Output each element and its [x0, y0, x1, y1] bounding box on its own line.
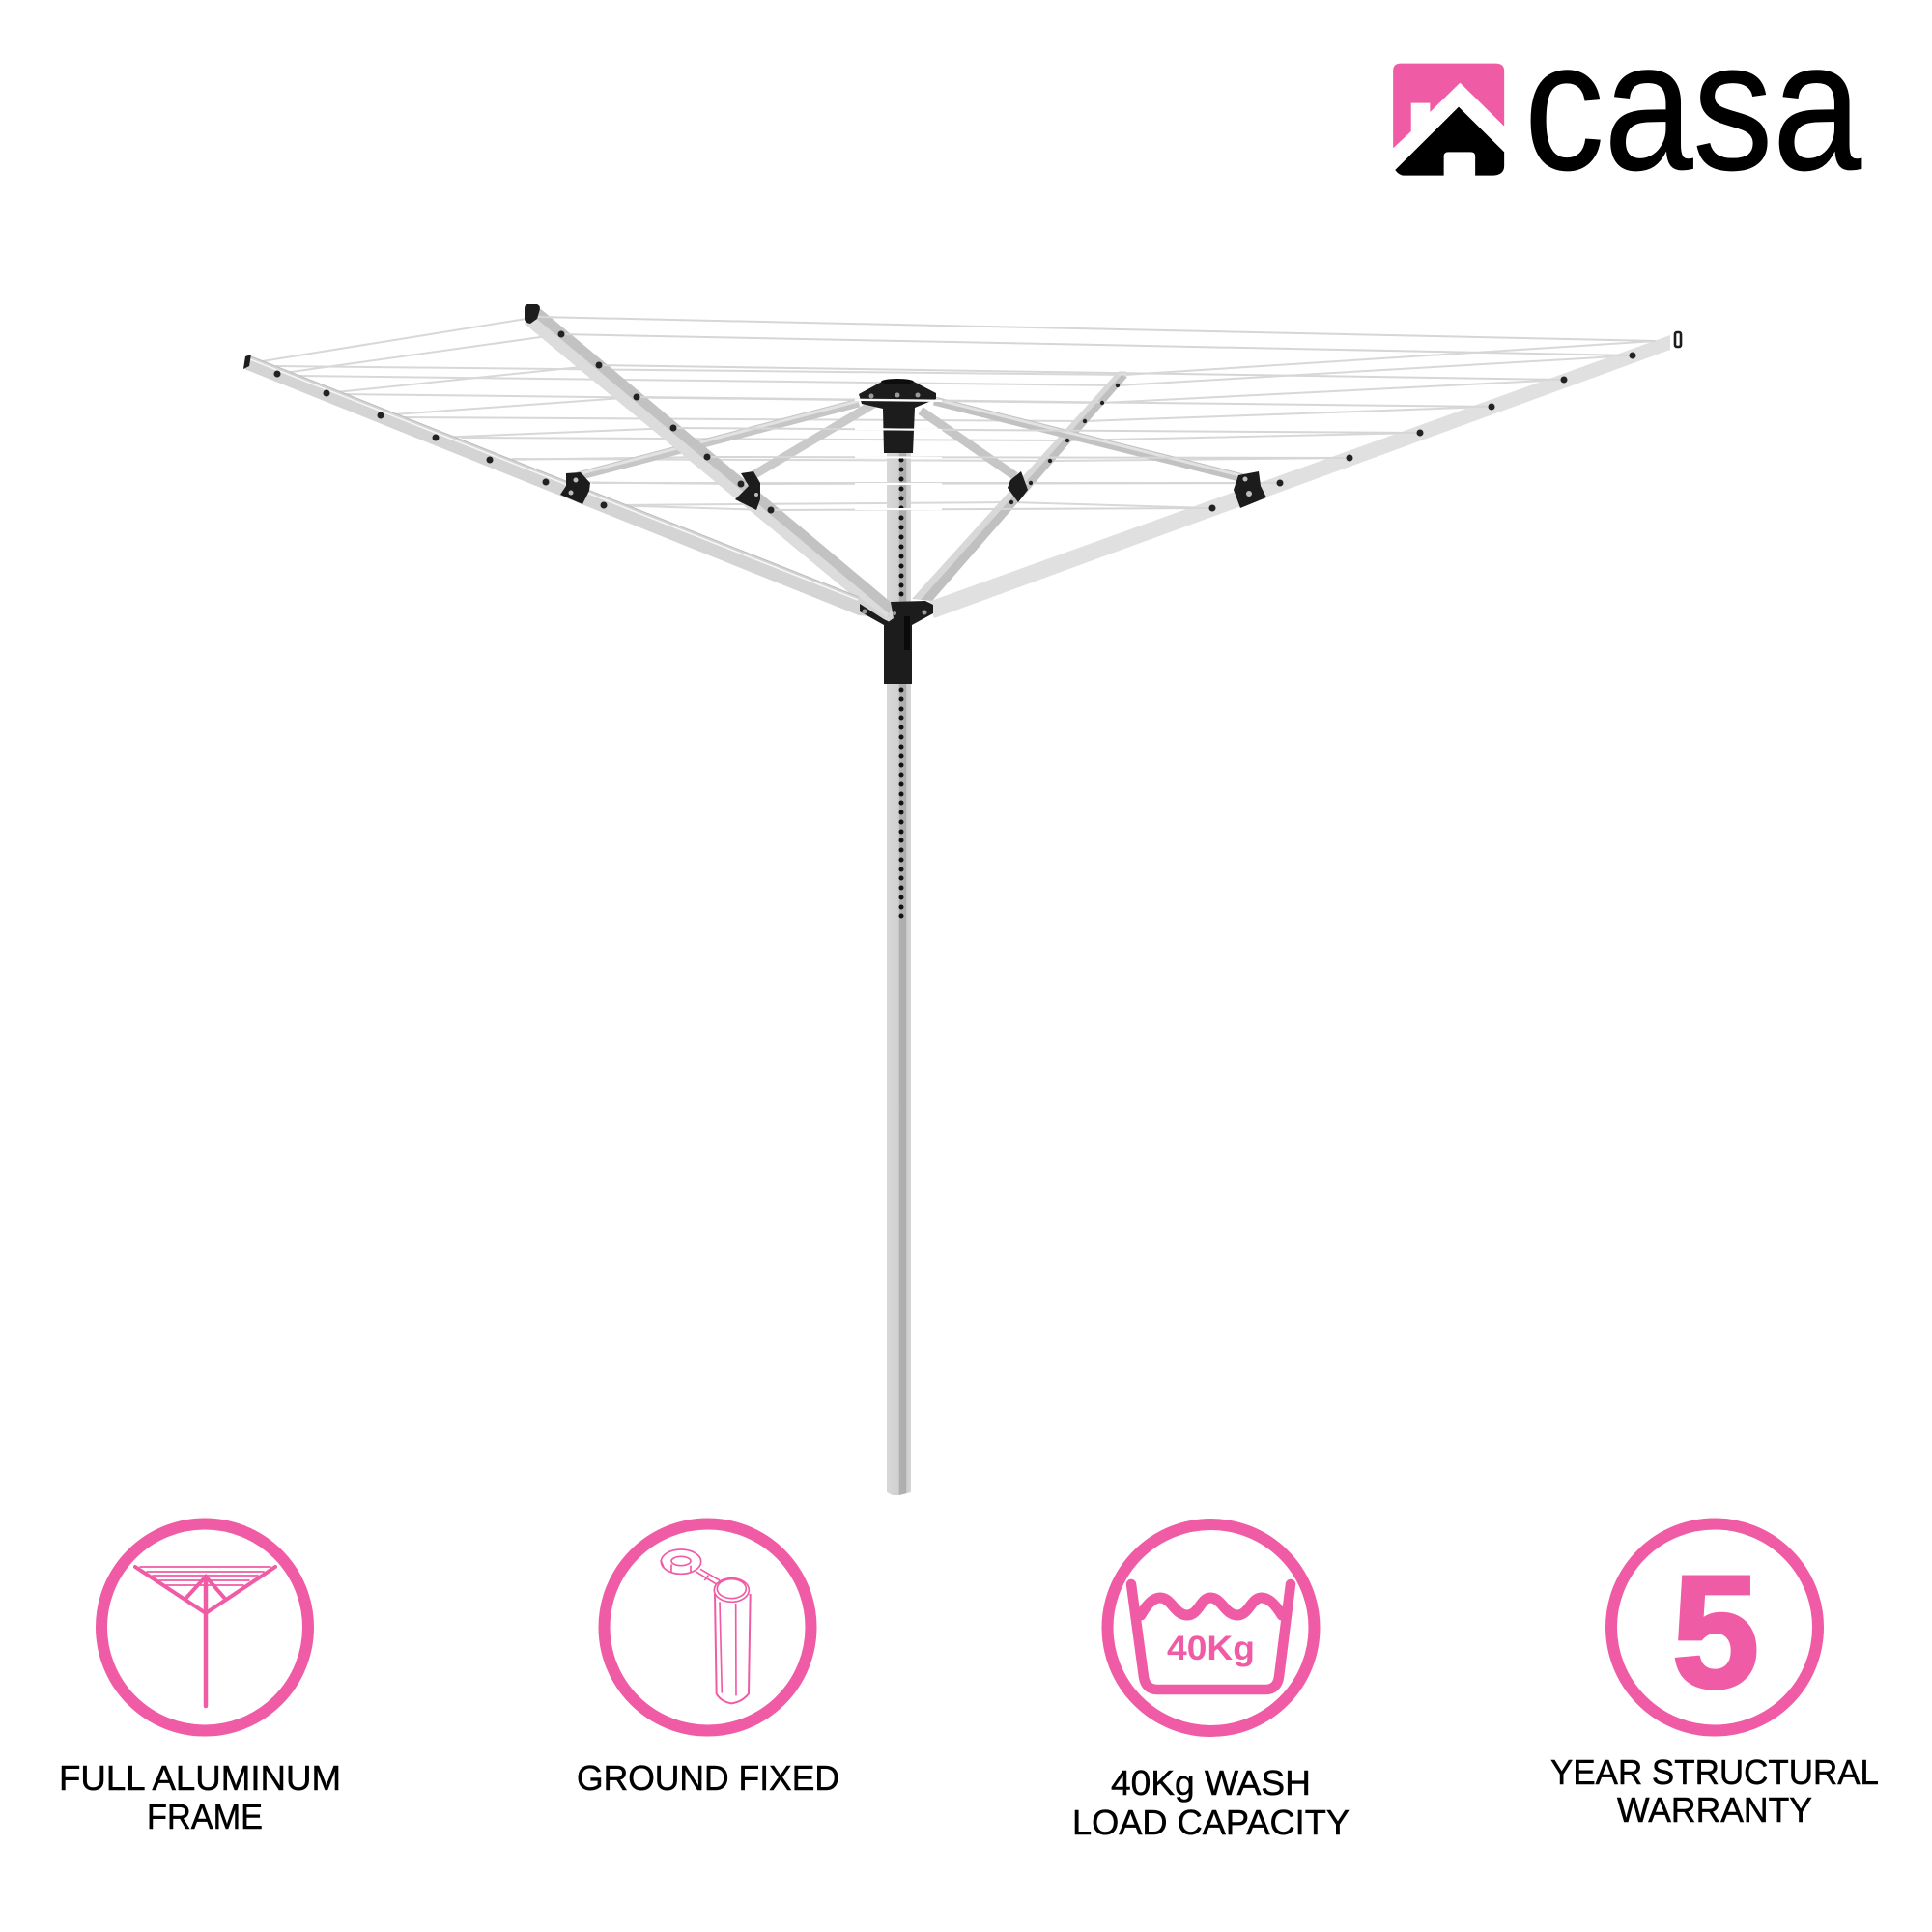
feature: full aluminum frame — [59, 1524, 341, 1836]
ring — [101, 1524, 308, 1731]
front left hub brace — [578, 401, 859, 476]
front right hub brace — [934, 399, 1243, 478]
logo: casa — [1393, 4, 1861, 209]
pole hole column upper and lower — [898, 458, 904, 918]
front left arm — [244, 356, 888, 618]
back left arm — [525, 309, 893, 623]
icon: wash tub — [1131, 1584, 1291, 1690]
bracket rivets — [568, 477, 1252, 497]
label — [1072, 1763, 1350, 1842]
back left arm end cap — [525, 304, 540, 324]
icon: ground spike — [661, 1549, 751, 1703]
back wires — [250, 317, 1656, 510]
back right arm upper tip — [1119, 371, 1126, 375]
label: GROUND FIXED — [577, 1758, 839, 1798]
front right arm — [928, 335, 1670, 618]
label: FRAME — [147, 1797, 263, 1836]
back right arm — [912, 374, 1127, 601]
label: FULL ALUMINUM — [59, 1758, 341, 1798]
icon: number 5: 5 — [1672, 1543, 1759, 1720]
logo mark: pink square with house — [1393, 64, 1504, 176]
wire hole grommets — [274, 330, 1636, 514]
label: LOAD CAPACITY — [1072, 1803, 1350, 1842]
front wires crossing frame — [538, 317, 1656, 510]
main pole — [887, 386, 911, 1495]
label: 40Kg WASH — [1111, 1763, 1311, 1803]
back right hub brace — [921, 411, 1015, 476]
ring — [1611, 1524, 1818, 1731]
feature: 5 year structural warranty — [1550, 1524, 1879, 1830]
label: YEAR STRUCTURAL — [1550, 1752, 1879, 1792]
ring — [1107, 1524, 1314, 1731]
top hub and sleeve — [859, 379, 936, 453]
label: WARRANTY — [1617, 1790, 1812, 1830]
label — [59, 1758, 341, 1836]
icon: rotary line — [135, 1567, 275, 1706]
label — [1550, 1752, 1879, 1830]
front left arm end cap — [243, 355, 251, 369]
feature: ground fixed — [577, 1524, 839, 1798]
back left hub brace — [752, 396, 887, 476]
lower hub bracket and sleeve — [860, 601, 933, 684]
icon text: 40Kg: 40Kg — [1167, 1630, 1255, 1667]
logo wordmark: casa — [1524, 4, 1861, 209]
ring — [605, 1524, 811, 1731]
product: rotary clothes line — [243, 304, 1681, 1495]
folding brackets on arms — [560, 471, 1266, 510]
feature: 40Kg wash load capacity — [1072, 1524, 1350, 1842]
front right arm end cap — [1675, 332, 1681, 347]
